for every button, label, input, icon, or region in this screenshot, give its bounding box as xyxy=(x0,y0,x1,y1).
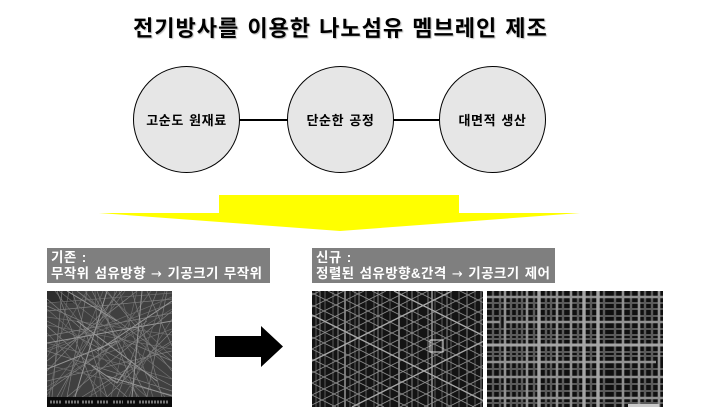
label: new method: 신규 : xyxy=(316,250,352,265)
circle: large-area production: 대면적 생산 xyxy=(458,113,526,128)
image: triangular aligned nanofiber micrograph xyxy=(312,291,483,407)
arrow: yellow down arrow xyxy=(100,195,580,231)
circle: simple process xyxy=(287,66,394,173)
title: 전기방사를 이용한 나노섬유 멤브레인 제조 xyxy=(133,16,548,41)
circle: high-purity raw material: 고순도 원재료 xyxy=(146,113,227,128)
circle: simple process: 단순한 공정 xyxy=(306,113,374,128)
image: random nanofiber micrograph xyxy=(47,291,172,407)
label: new method: 정렬된 섬유방향&간격 → 기공크기 제어 xyxy=(316,266,550,282)
connector line between circles xyxy=(239,119,439,121)
label: new method xyxy=(312,248,555,283)
inset selection square xyxy=(430,340,443,352)
label: existing method xyxy=(47,248,270,283)
image: square grid nanofiber micrograph xyxy=(487,291,663,407)
circle: high-purity raw material xyxy=(133,66,240,173)
label: existing method: 무작위 섬유방향 → 기공크기 무작위 xyxy=(51,266,262,282)
circle: large-area production xyxy=(439,66,546,173)
label: existing method: 기존 : xyxy=(51,250,87,265)
arrow: black right arrow xyxy=(215,326,283,367)
